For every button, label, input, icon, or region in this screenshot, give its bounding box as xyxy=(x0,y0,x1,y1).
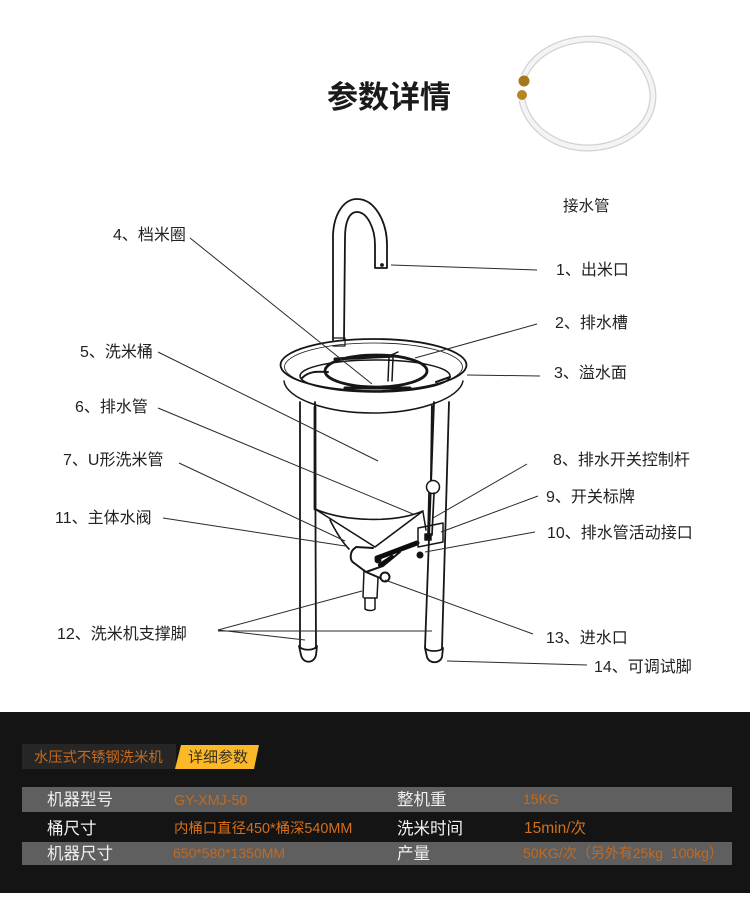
detail parameters tab xyxy=(175,745,259,769)
table row 3 xyxy=(22,842,732,865)
table row 1 xyxy=(22,787,732,812)
callout labels: 9、开关标牌 xyxy=(546,488,635,506)
table row 1: GY-XMJ-50 xyxy=(174,793,247,809)
title: 参数详情 xyxy=(327,80,451,115)
table row 3: 650*580*1350MM xyxy=(173,845,285,861)
table row 1: 整机重 xyxy=(397,790,446,809)
left leg xyxy=(299,402,317,662)
table row 3: 产量 xyxy=(397,844,430,863)
callout labels: 11、主体水阀 xyxy=(55,509,152,527)
callout labels: 6、排水管 xyxy=(75,398,148,416)
table row 2: 内桶口直径450*桶深540MM xyxy=(174,820,352,837)
product name tab xyxy=(22,744,176,769)
table row 2: 洗米时间 xyxy=(397,819,463,838)
control lever and ball xyxy=(418,480,443,547)
callout labels: 4、档米圈 xyxy=(113,226,186,244)
table row 2: 15min/次 xyxy=(524,819,586,837)
table row 3: 50KG/次（另外有25kg 100kg） xyxy=(523,845,723,861)
callout labels: 5、洗米桶 xyxy=(80,343,153,361)
table row 1: 15KG xyxy=(523,791,559,807)
callout labels: 2、排水槽 xyxy=(555,314,628,332)
table row 3: 机器尺寸 xyxy=(47,844,113,863)
callout labels: 14、可调试脚 xyxy=(594,658,692,676)
rim of the tub xyxy=(280,339,466,413)
table row 2 xyxy=(47,819,586,838)
label: water hose: 接水管 xyxy=(563,197,610,215)
callout labels: 1、出米口 xyxy=(556,261,629,279)
icon: water hose photo xyxy=(517,39,653,148)
product name tab: 水压式不锈钢洗米机 xyxy=(34,749,163,766)
callout labels: 13、进水口 xyxy=(546,629,628,647)
machine drawing xyxy=(280,199,466,662)
callout labels: 12、洗米机支撑脚 xyxy=(57,625,187,643)
bucket xyxy=(315,406,432,549)
rice outlet tube xyxy=(333,199,387,346)
callout labels xyxy=(55,226,693,676)
callout labels: 8、排水开关控制杆 xyxy=(553,451,690,469)
callout lines xyxy=(158,238,587,665)
right leg xyxy=(425,402,449,662)
panel: parameters xyxy=(0,712,750,893)
inner ring xyxy=(300,352,450,392)
callout labels: 7、U形洗米管 xyxy=(63,451,163,469)
callout labels: 10、排水管活动接口 xyxy=(547,524,693,542)
callout labels: 3、溢水面 xyxy=(554,364,627,382)
detail parameters tab: 详细参数 xyxy=(188,749,248,766)
table row 1: 机器型号 xyxy=(47,790,113,809)
valve assembly xyxy=(351,543,423,610)
table row 2: 桶尺寸 xyxy=(47,819,96,838)
